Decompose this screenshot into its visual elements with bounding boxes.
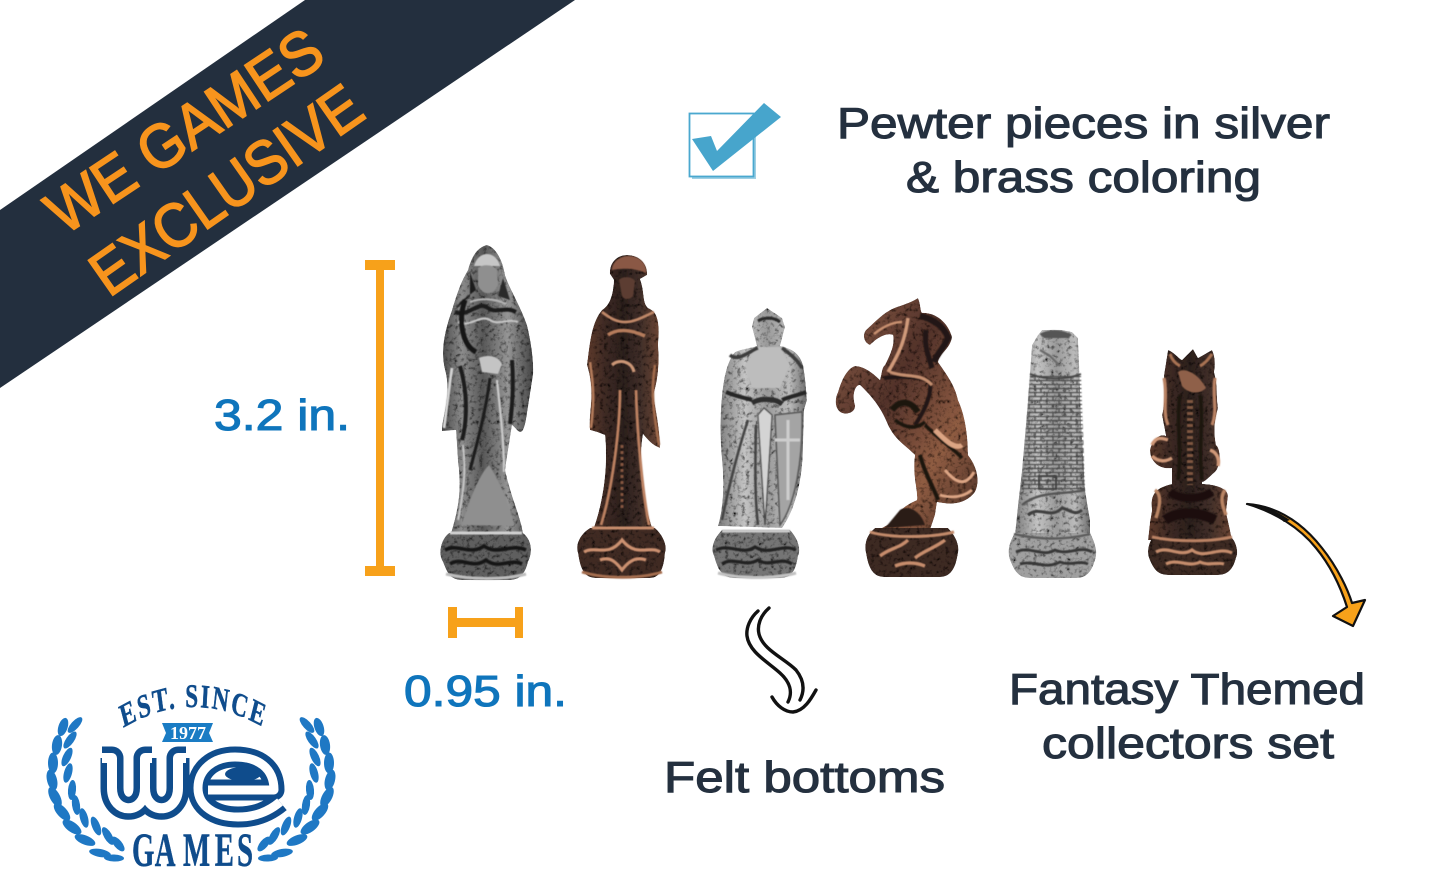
height dimension bracket (365, 260, 395, 576)
chess piece: wizard (440, 245, 533, 580)
icon: checkbox (690, 103, 781, 179)
heading: pewter pieces (837, 99, 1330, 202)
chess piece: rearing horse (836, 298, 978, 577)
logo ribbon: 1977: 1977 (170, 723, 206, 743)
logo: WE Games (46, 684, 336, 877)
corner banner (0, 0, 575, 388)
heading: pewter pieces: & brass coloring (906, 153, 1261, 202)
chess piece: knight (712, 308, 807, 578)
heading: pewter pieces: Pewter pieces in silver (837, 99, 1330, 148)
label: fantasy themed: Fantasy Themed (1009, 665, 1365, 714)
label: fantasy themed (1009, 665, 1365, 768)
banner text: WE GAMES: WE GAMES (34, 15, 336, 248)
logo text: games: GAMES (132, 824, 253, 877)
chess piece: tower (1009, 330, 1096, 578)
chess piece: queen (577, 255, 666, 578)
label: felt bottoms: Felt bottoms (664, 753, 945, 802)
arrow: curved orange (1247, 504, 1365, 626)
label: width: 0.95 in. (404, 667, 567, 716)
laurel wreath (45, 715, 337, 862)
icon: felt steam swirl (747, 608, 816, 712)
width dimension bracket (448, 607, 523, 638)
label: height: 3.2 in. (214, 391, 350, 440)
logo mark: WE (102, 757, 280, 817)
logo text: est. since: EST. SINCE (118, 684, 266, 728)
label: fantasy themed: collectors set (1042, 719, 1334, 768)
banner text: EXCLUSIVE: EXCLUSIVE (77, 72, 376, 309)
chess piece: dragon (1148, 349, 1237, 575)
